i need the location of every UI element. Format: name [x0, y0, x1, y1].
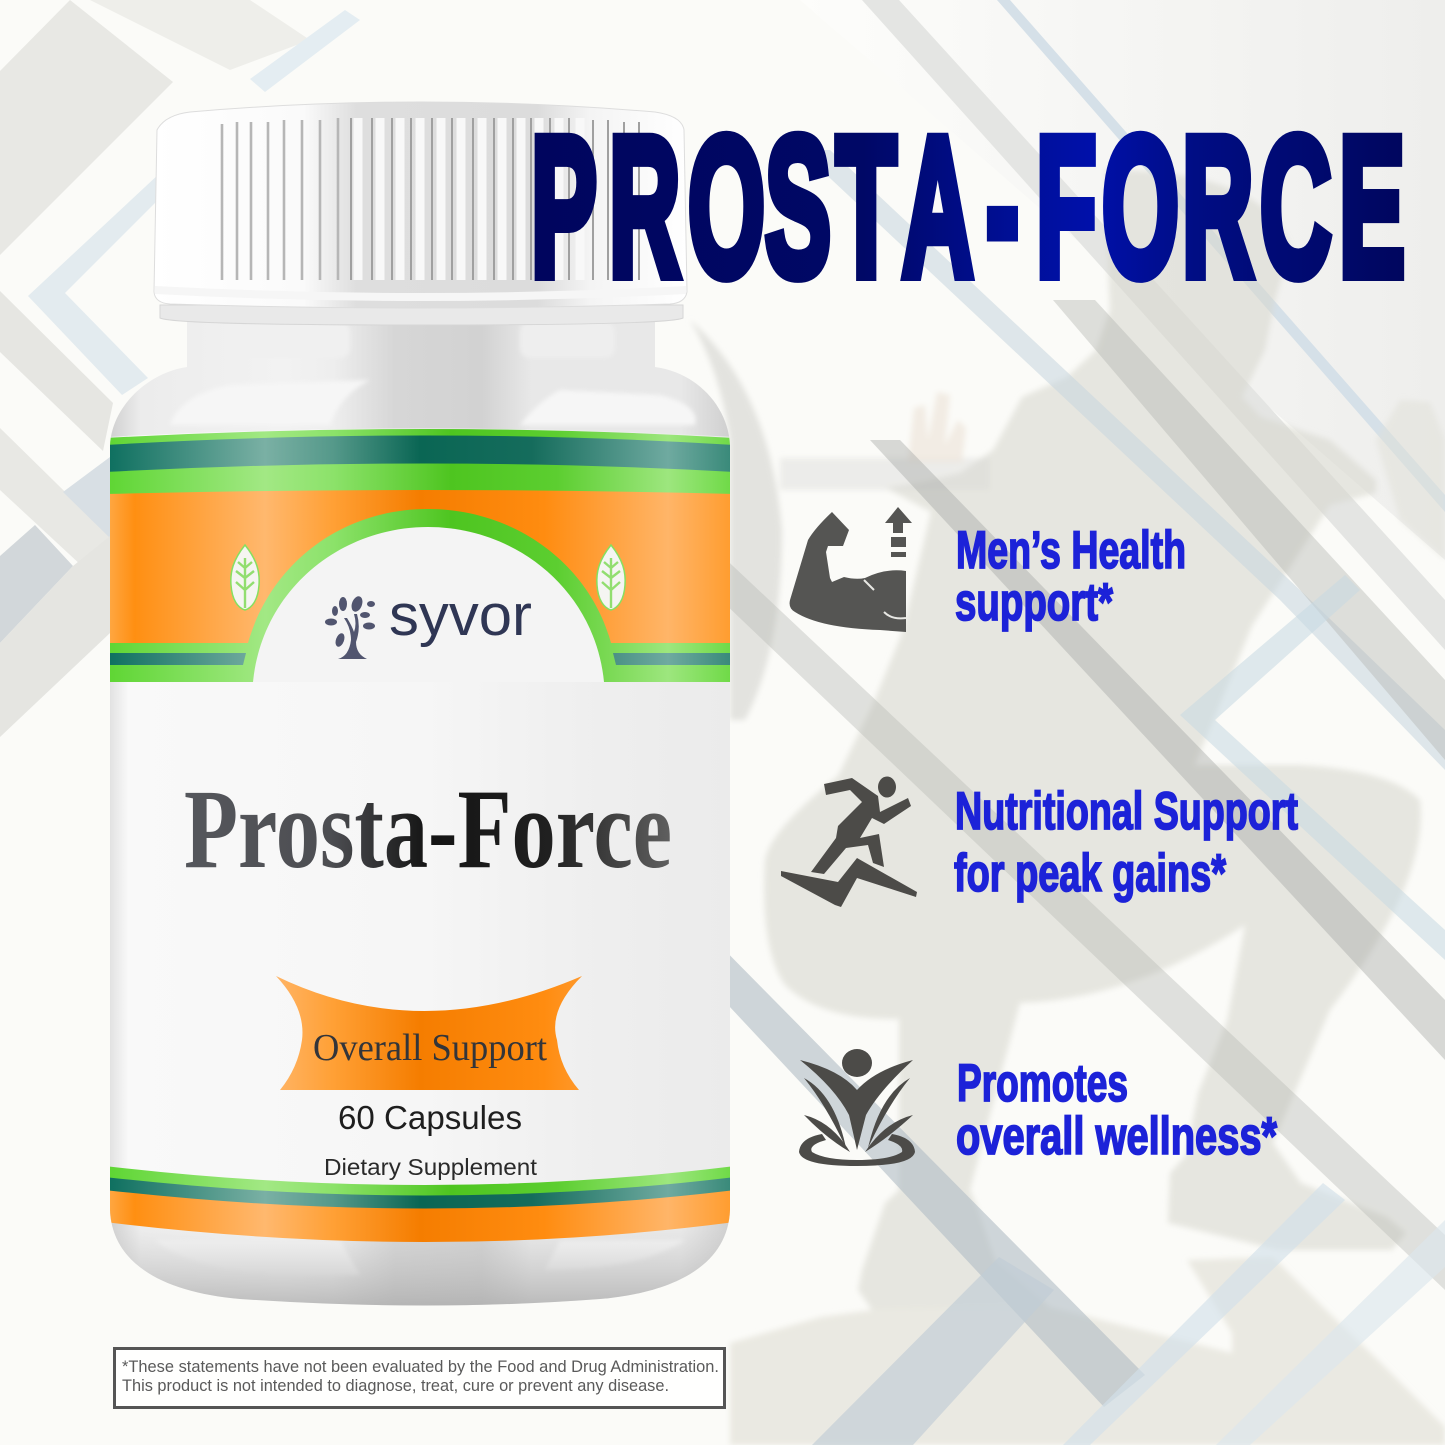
weight ring: [690, 320, 782, 720]
text: overall wellness*: [956, 1107, 1277, 1166]
label arch with side stripes: [105, 509, 735, 682]
benefit: men's health: [790, 507, 1186, 632]
text: [954, 782, 1298, 903]
cap ribs: [222, 118, 639, 280]
right arm: [1376, 400, 1445, 560]
label bottom stripes: [105, 1166, 735, 1242]
label top stripes: [110, 429, 730, 643]
disclaimer box: This product is not intended to diagnose, treat, cure or prevent any disease.: [122, 1377, 669, 1395]
leaf icons on label: [231, 545, 625, 610]
bottle neck: [160, 305, 683, 368]
barbell bar: [780, 458, 990, 490]
bottle body: [105, 360, 735, 1310]
athlete body: [764, 170, 1421, 1310]
icon: leaf left: [231, 545, 259, 610]
product name: Prosta-Force: [184, 767, 672, 892]
icon: wellness figure: [799, 1049, 915, 1166]
bottle cap: [154, 102, 687, 308]
text: Men’s Health: [956, 521, 1186, 580]
floor mound: [730, 1257, 1445, 1445]
brand logo: syvor: [325, 583, 532, 659]
icon: leaf right: [597, 545, 625, 610]
wordmark: syvor: [389, 583, 532, 648]
capsule count: 60 Capsules: [338, 1099, 522, 1136]
disclaimer box: [114, 1348, 724, 1408]
banner: Overall Support: Overall Support: [313, 1027, 547, 1069]
background: squatting athlete silhouette: [690, 170, 1445, 1445]
disclaimer box: *These statements have not been evaluated by the Food and Drug Administration.: [122, 1358, 719, 1376]
raised hand: [908, 392, 966, 462]
text: [955, 521, 1186, 632]
text: Promotes: [957, 1054, 1128, 1113]
text: support*: [955, 573, 1113, 632]
supplement line: Dietary Supplement: [324, 1154, 538, 1180]
product bottle: [105, 102, 735, 1310]
benefit: overall wellness: [799, 1049, 1277, 1166]
text: [956, 1054, 1277, 1166]
label panel: [105, 428, 735, 1241]
benefit: nutritional support: [781, 776, 1298, 907]
text: Nutritional Support: [955, 782, 1298, 841]
banner: Overall Support: [276, 976, 582, 1090]
text: for peak gains*: [954, 844, 1226, 903]
icon: flexed arm with up arrow: [790, 507, 912, 632]
background: bands over the athlete: [700, 150, 1445, 1445]
icon: runner: [781, 776, 917, 907]
title: PROSTA-FORCE: [531, 97, 1405, 318]
icon: tree: [325, 595, 375, 659]
